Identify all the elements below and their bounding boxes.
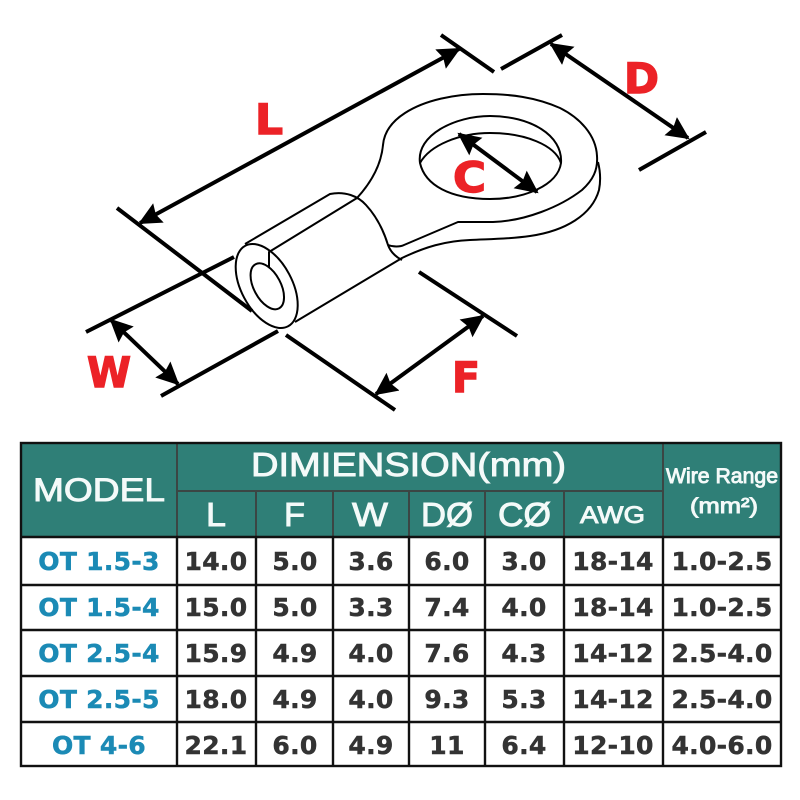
row: OT 1.5-3: 14.0	[185, 547, 247, 576]
row: OT 1.5-3: 3.0	[501, 547, 547, 576]
header: D diameter: DØ	[421, 496, 473, 533]
F extension lines	[286, 272, 517, 410]
row: OT 1.5-4: 3.3	[348, 593, 394, 622]
header: wire range unit: (mm²)	[690, 495, 758, 518]
row: OT 2.5-5: 2.5-4.0	[671, 685, 773, 714]
L label: L	[255, 95, 283, 144]
row: OT 1.5-4: 4.0	[501, 593, 547, 622]
row: OT 1.5-4: 15.0	[185, 593, 247, 622]
dimensions table	[21, 443, 781, 766]
row: OT 4-6: 4.9	[348, 731, 394, 760]
L extension lines	[117, 35, 494, 311]
row: OT 4-6: 12-10	[572, 731, 654, 760]
table body background	[21, 537, 781, 766]
row: OT 2.5-4: 7.6	[424, 639, 470, 668]
header: model: MODEL	[33, 472, 165, 508]
row: OT 2.5-5: 18.0	[185, 685, 247, 714]
row: OT 4-6: 6.4	[501, 731, 547, 760]
W extension lines	[86, 257, 278, 396]
row: OT 2.5-4: 4.3	[501, 639, 547, 668]
table header labels	[33, 446, 778, 533]
dimension D	[501, 35, 706, 170]
D label: D	[624, 54, 659, 103]
dimension C	[453, 134, 537, 202]
header: C diameter: CØ	[498, 496, 551, 533]
header: F: F	[284, 496, 305, 533]
row: OT 2.5-5	[38, 685, 773, 714]
row: OT 1.5-4: 18-14	[572, 593, 654, 622]
row: OT 1.5-4: 1.0-2.5	[671, 593, 773, 622]
diagram: ring terminal technical drawing	[86, 35, 706, 410]
row: OT 1.5-4: 5.0	[272, 593, 318, 622]
row: OT 4-6	[52, 731, 773, 760]
row: OT 2.5-5: OT 2.5-5	[38, 685, 160, 714]
row: OT 2.5-4: OT 2.5-4	[38, 639, 160, 668]
row: OT 4-6: 11	[429, 731, 465, 760]
row: OT 2.5-5: 5.3	[501, 685, 547, 714]
row: OT 2.5-4	[38, 639, 773, 668]
D arrow	[551, 44, 688, 138]
row: OT 2.5-5: 4.0	[348, 685, 394, 714]
dimension W	[86, 257, 278, 397]
ring hole inner edge	[420, 133, 561, 163]
row: OT 1.5-3: OT 1.5-3	[38, 547, 160, 576]
row: OT 1.5-3: 1.0-2.5	[671, 547, 773, 576]
barrel top and collar	[245, 193, 402, 260]
header: AWG: AWG	[580, 502, 645, 529]
row: OT 2.5-5: 9.3	[424, 685, 470, 714]
row: OT 1.5-3: 6.0	[424, 547, 470, 576]
row: OT 4-6: 4.0-6.0	[671, 731, 773, 760]
row: OT 1.5-3	[38, 547, 773, 576]
W arrow	[111, 320, 178, 384]
row: OT 1.5-3: 5.0	[272, 547, 318, 576]
C label: C	[453, 153, 486, 202]
row: OT 2.5-4: 4.0	[348, 639, 394, 668]
row: OT 2.5-4: 4.9	[272, 639, 318, 668]
header: L: L	[206, 496, 226, 533]
row: OT 2.5-5: 4.9	[272, 685, 318, 714]
barrel underside and plate edge	[295, 162, 600, 322]
row: OT 4-6: OT 4-6	[52, 731, 146, 760]
ring hole upper rim	[420, 116, 561, 199]
row: OT 4-6: 22.1	[185, 731, 247, 760]
row: OT 2.5-4: 2.5-4.0	[671, 639, 773, 668]
row: OT 1.5-3: 18-14	[572, 547, 654, 576]
barrel slit	[269, 198, 357, 267]
row: OT 1.5-4: OT 1.5-4	[38, 593, 160, 622]
D extension lines	[501, 35, 706, 170]
F arrow	[376, 316, 483, 394]
C arrow	[459, 134, 537, 192]
barrel bore	[244, 258, 291, 315]
dimension F	[286, 272, 517, 410]
row: OT 1.5-4	[38, 593, 773, 622]
row: OT 1.5-3: 3.6	[348, 547, 394, 576]
F label: F	[452, 353, 480, 402]
ring tongue top face	[357, 94, 597, 246]
row: OT 4-6: 6.0	[272, 731, 318, 760]
row: OT 2.5-5: 14-12	[572, 685, 654, 714]
dimension L	[117, 35, 494, 311]
table header background	[21, 443, 781, 537]
terminal outline	[223, 94, 600, 338]
L arrow	[140, 49, 459, 223]
row: OT 1.5-4: 7.4	[424, 593, 470, 622]
row: OT 2.5-4: 14-12	[572, 639, 654, 668]
header: wire range: Wire Range	[666, 465, 778, 488]
header: dimension: DIMIENSION(mm)	[251, 446, 566, 483]
W label: W	[87, 348, 131, 397]
header: W: W	[352, 496, 389, 533]
row: OT 2.5-4: 15.9	[185, 639, 247, 668]
barrel front ellipse	[223, 234, 311, 338]
